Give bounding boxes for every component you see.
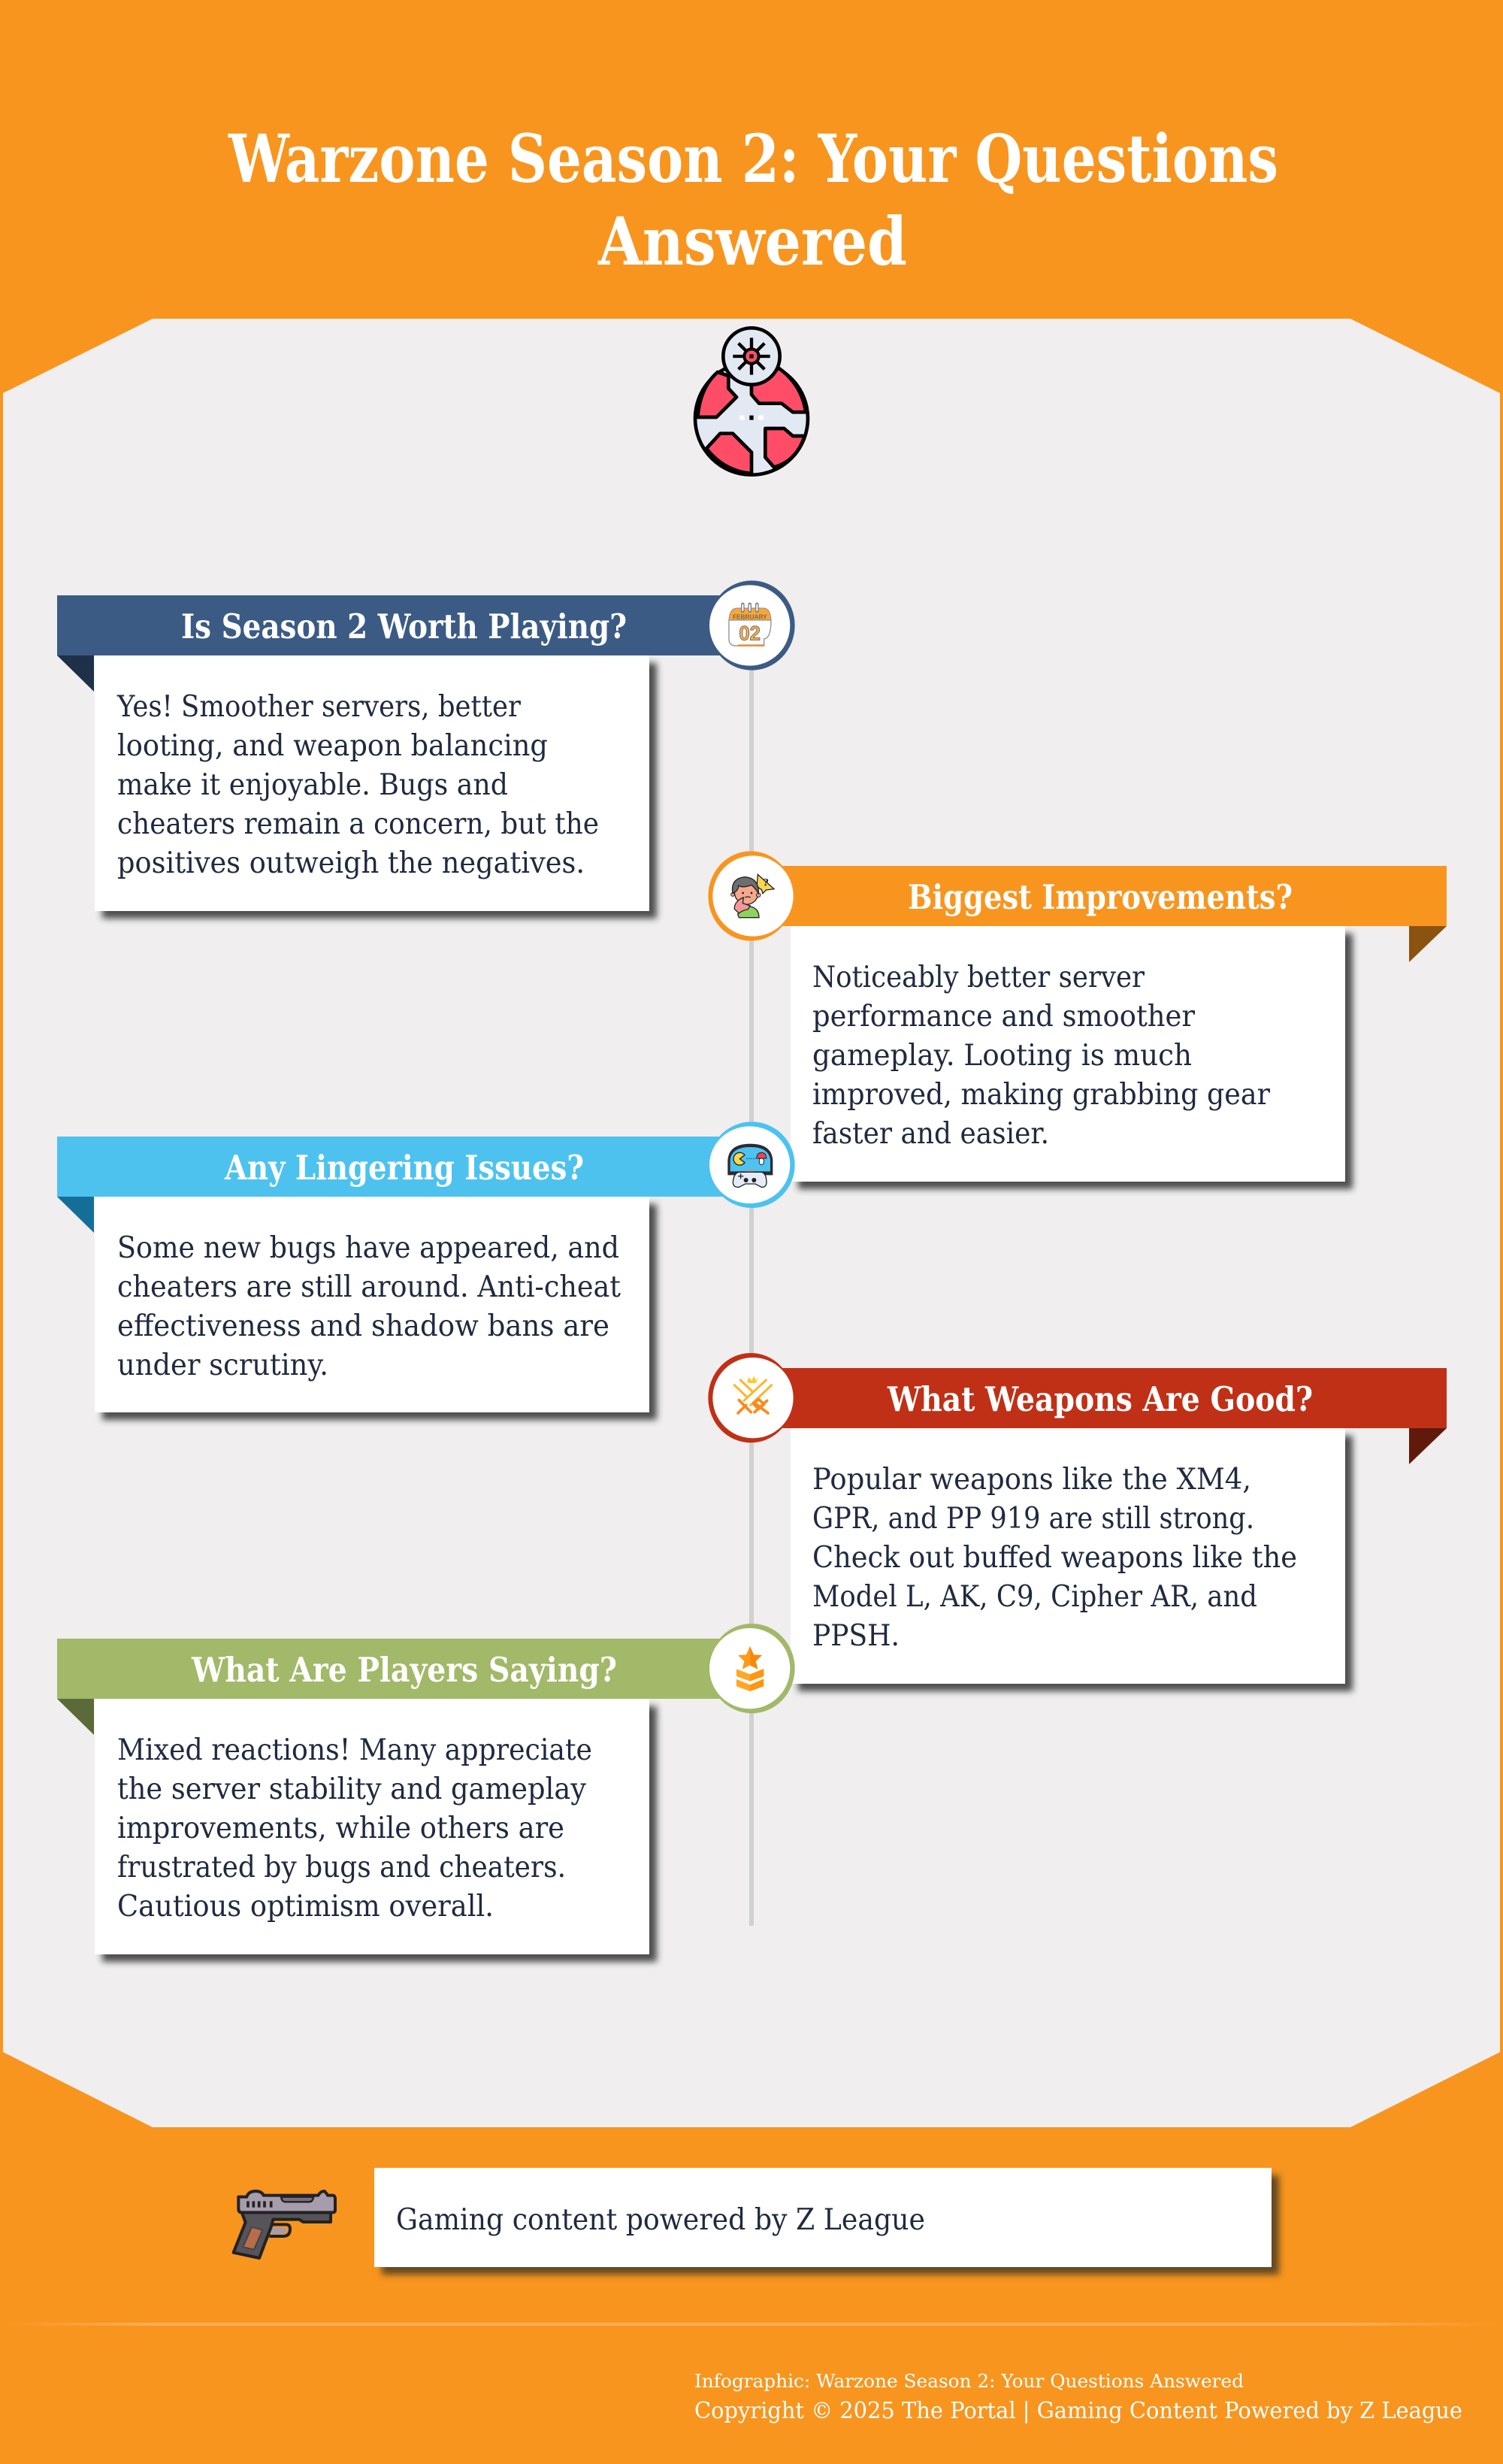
- answer card: Popular weapons like the XM4,: [812, 1463, 1251, 1497]
- icon: star rank badge in circle: [709, 1624, 795, 1713]
- answer card: [95, 655, 657, 919]
- panel: What Are Players Saying?: [57, 1624, 795, 1962]
- sponsor callout box: [374, 2168, 1279, 2275]
- title: [228, 120, 1278, 280]
- icon: thinking person in circle: ?: [763, 877, 769, 888]
- answer card: positives outweigh the negatives.: [117, 846, 585, 880]
- answer card: cheaters remain a concern, but the: [117, 807, 599, 841]
- panel: Any Lingering Issues?: [57, 1122, 795, 1420]
- answer card: [791, 1428, 1353, 1691]
- banner ribbon: Biggest Improvements?: [908, 877, 1293, 917]
- answer card: cheaters are still around. Anti-cheat: [117, 1270, 621, 1304]
- icon: calendar in circle: 02: [739, 622, 761, 644]
- banner ribbon: Any Lingering Issues?: [224, 1148, 584, 1188]
- answer card: Model L, AK, C9, Cipher AR, and: [812, 1580, 1257, 1614]
- answer card: the server stability and gameplay: [117, 1772, 586, 1806]
- answer card: [95, 1699, 657, 1962]
- timeline line: [749, 625, 754, 1926]
- answer card: Check out buffed weapons like the: [812, 1541, 1297, 1575]
- panel: Biggest Improvements?: [708, 851, 1447, 1189]
- title: Warzone Season 2: Your Questions: [228, 120, 1278, 198]
- answer card: effectiveness and shadow bans are: [117, 1309, 609, 1343]
- footer credits: Copyright © 2025 The Portal | Gaming Content Powered by Z League: [694, 2398, 1462, 2424]
- footer credits: Infographic: Warzone Season 2: Your Questions Answered: [694, 2371, 1244, 2392]
- answer card: GPR, and PP 919 are still strong.: [812, 1502, 1254, 1536]
- banner ribbon: [770, 866, 1447, 962]
- banner ribbon: What Are Players Saying?: [191, 1650, 617, 1690]
- icon: crossed swords in circle: [708, 1353, 794, 1442]
- icon: game screen and controller in circle: [709, 1122, 795, 1208]
- answer card: improved, making grabbing gear: [812, 1078, 1270, 1112]
- answer card: faster and easier.: [812, 1117, 1049, 1151]
- banner ribbon: [57, 1137, 733, 1233]
- icon: calendar in circle: FEBRUARY: [733, 613, 767, 620]
- answer card: Noticeably better server: [812, 961, 1145, 994]
- sponsor callout box: Gaming content powered by Z League: [396, 2203, 925, 2237]
- panel: Is Season 2 Worth Playing?: [57, 580, 795, 919]
- icon: calendar in circle: [709, 580, 795, 670]
- answer card: looting, and weapon balancing: [117, 729, 548, 763]
- title: Answered: [597, 202, 907, 280]
- banner ribbon: [57, 1639, 733, 1735]
- panel: main content background: [3, 319, 1500, 2127]
- footer credits: [694, 2371, 1462, 2424]
- icon: pistol: [234, 2191, 335, 2258]
- answer card: under scrutiny.: [117, 1349, 328, 1382]
- answer card: PPSH.: [812, 1619, 900, 1653]
- icon: thinking person in circle: [708, 851, 794, 941]
- banner ribbon: [57, 595, 733, 692]
- answer card: Mixed reactions! Many appreciate: [117, 1733, 592, 1767]
- banner ribbon: Is Season 2 Worth Playing?: [181, 607, 627, 646]
- icon: globe with virus: [695, 328, 808, 475]
- answer card: gameplay. Looting is much: [812, 1039, 1192, 1073]
- answer card: performance and smoother: [812, 1000, 1195, 1034]
- answer card: Yes! Smoother servers, better: [116, 690, 521, 724]
- answer card: make it enjoyable. Bugs and: [117, 768, 508, 802]
- answer card: [791, 926, 1353, 1189]
- answer card: improvements, while others are: [117, 1812, 564, 1845]
- answer card: Some new bugs have appeared, and: [117, 1231, 619, 1265]
- answer card: frustrated by bugs and cheaters.: [117, 1851, 566, 1884]
- panel: What Weapons Are Good?: [708, 1353, 1447, 1691]
- banner ribbon: [770, 1368, 1447, 1464]
- banner ribbon: What Weapons Are Good?: [887, 1379, 1313, 1419]
- answer card: [95, 1197, 657, 1420]
- answer card: Cautious optimism overall.: [117, 1890, 494, 1924]
